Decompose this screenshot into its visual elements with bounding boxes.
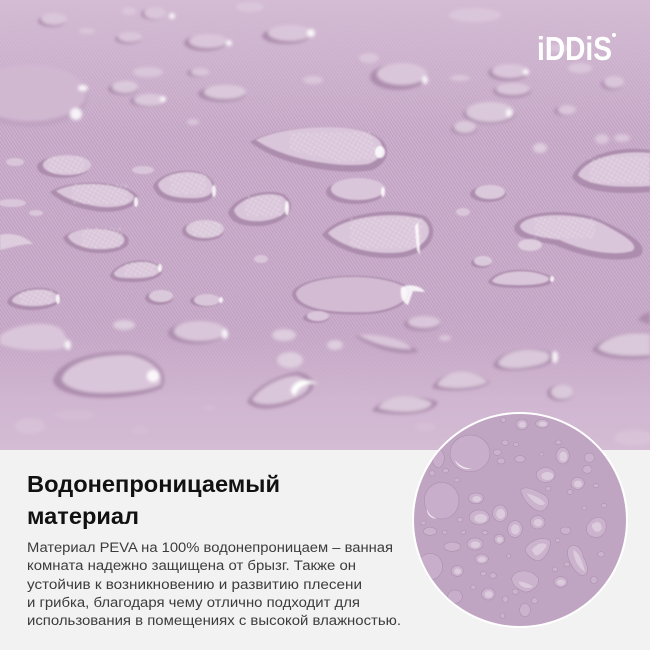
inset drops [417,418,607,618]
body text [27,540,401,629]
heading [27,471,280,529]
body text: использования в помещениях с высокой влажностью. [27,613,401,629]
drops: lower left [0,320,318,434]
body text: Материал PEVA на 100% водонепроницаем – ванная [27,540,393,556]
drops: upper area [0,2,630,153]
heading: Водонепроницаемый [27,471,280,497]
bottom text panel [0,450,650,650]
drops: large drops, middle band [0,127,650,323]
drops: lower right [327,312,650,446]
heading: материал [27,503,139,529]
body text: устойчив к возникновению и развитию плесени [27,577,362,593]
body text: комната надежно защищена от брызг. Также он [27,558,356,574]
photo: water drops on fabric [0,0,650,450]
logo: IDDIS: iDDiS [537,30,612,67]
circular inset: close-up of drops [412,412,628,628]
body text: и грибка, благодаря чему отлично подходит для [27,595,360,611]
